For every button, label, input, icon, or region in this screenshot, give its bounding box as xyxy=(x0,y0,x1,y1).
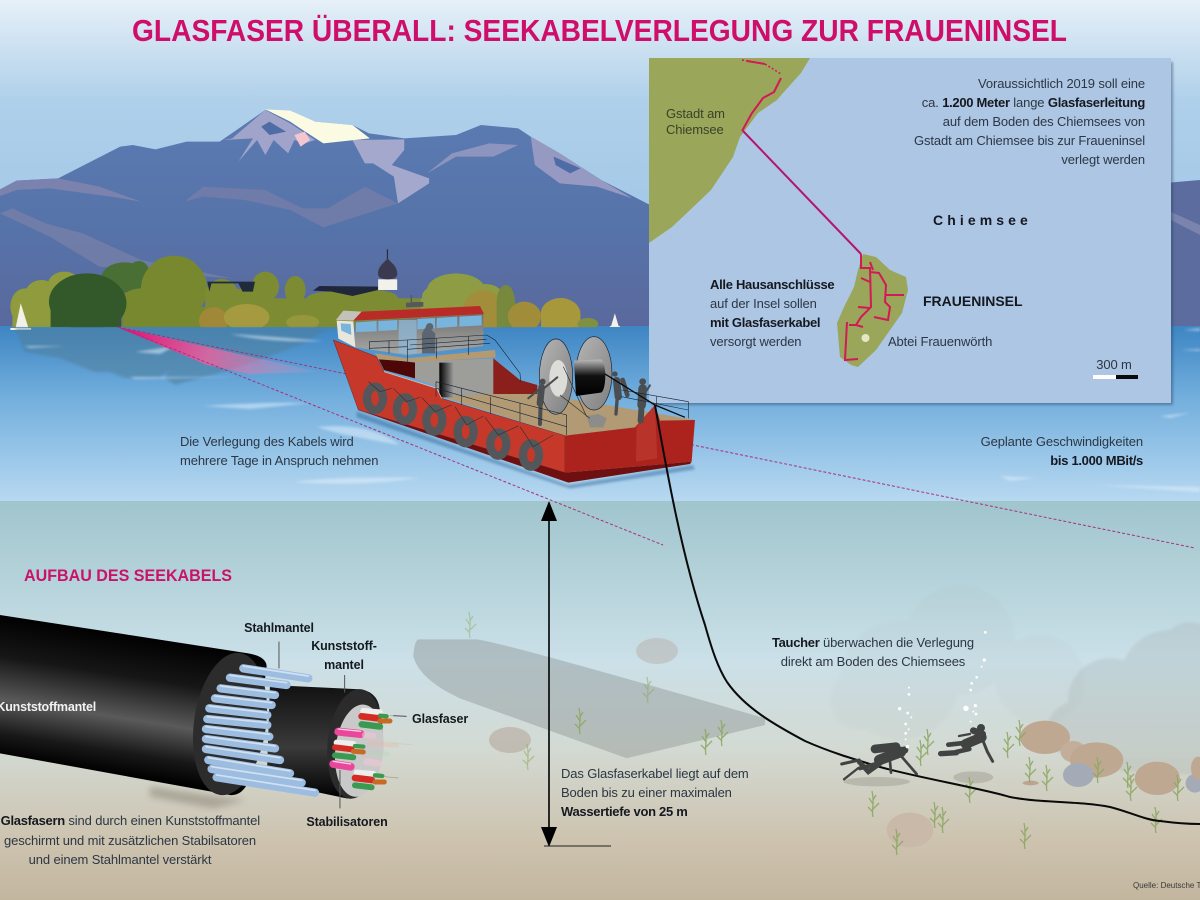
mainland xyxy=(649,58,810,243)
mountain edge right of map xyxy=(1165,180,1200,330)
scale bar: 300 m xyxy=(1096,357,1132,372)
ground shadow xyxy=(150,787,247,808)
text: laying duration: mehrere Tage in Anspruch nehmen xyxy=(180,453,378,468)
water highlights xyxy=(24,328,1200,492)
tree reflection in lake xyxy=(15,328,330,385)
text: water depth: Boden bis zu einer maximalen xyxy=(561,785,732,800)
pink cable wedge on lake xyxy=(117,327,320,374)
cable labels: Stahlmantel xyxy=(244,621,314,635)
crew silhouettes xyxy=(528,371,650,424)
island with trees and church xyxy=(10,249,620,334)
text: house connections: mit Glasfaserkabel xyxy=(710,315,820,330)
underwater section xyxy=(0,501,1200,900)
fibre bundle middle xyxy=(335,743,363,757)
boat xyxy=(333,295,695,489)
leader lines xyxy=(279,642,407,808)
text: planned speed: Geplante Geschwindigkeiten xyxy=(981,434,1143,449)
heading: cable structure: AUFBAU DES SEEKABELS xyxy=(24,567,232,585)
sailboat right xyxy=(610,313,620,327)
stabilisers xyxy=(333,729,378,767)
crew member at reel xyxy=(528,377,557,424)
map intro text: ca. 1.200 Meter lange Glasfaserleitung xyxy=(922,95,1145,110)
crew member at stern xyxy=(639,378,650,421)
boat shadow on water xyxy=(357,412,695,489)
tires xyxy=(367,387,539,467)
cable leaving the drum xyxy=(605,374,685,417)
fibre bundle bottom xyxy=(355,773,398,787)
fibre bundle top xyxy=(362,711,405,727)
seabed rocks and shadows xyxy=(843,721,1200,847)
railings xyxy=(369,335,688,435)
church xyxy=(313,249,397,296)
lake cable route xyxy=(743,131,861,254)
background: sky xyxy=(0,0,1200,330)
mid rocks xyxy=(489,638,678,753)
antenna xyxy=(406,295,423,307)
map panel xyxy=(649,58,1171,403)
inner cable xyxy=(267,685,388,802)
map intro text: verlegt werden xyxy=(1061,152,1145,167)
faded background rocks right xyxy=(1047,622,1200,775)
diver two xyxy=(941,724,993,761)
abbey marker xyxy=(862,334,870,342)
stairs xyxy=(493,358,537,394)
text: planned speed: bis 1.000 MBit/s xyxy=(1050,453,1143,468)
divers xyxy=(842,631,993,779)
sailboat left xyxy=(10,303,31,330)
jacket end face xyxy=(184,648,276,800)
map intro text: auf dem Boden des Chiemsees von xyxy=(943,114,1145,129)
text: water depth: Das Glasfaserkabel liegt auf dem xyxy=(561,766,749,781)
outer plastic jacket xyxy=(0,615,267,795)
island network xyxy=(845,254,904,360)
text: house connections: auf der Insel sollen xyxy=(710,296,817,311)
seaweed xyxy=(465,612,1184,855)
lake surface xyxy=(0,326,1200,502)
person in cabin xyxy=(422,323,435,353)
cable labels xyxy=(0,621,468,829)
text: cable description: Glasfasern sind durch einen Kunststoffmantel xyxy=(1,813,260,828)
text: laying duration: Die Verlegung des Kabels wird xyxy=(180,434,354,449)
hull bottom xyxy=(358,410,692,483)
upper deck xyxy=(375,350,496,362)
crew member behind reel xyxy=(612,371,627,414)
cable reel xyxy=(539,337,612,427)
tire ropes xyxy=(368,382,553,447)
deck xyxy=(442,392,695,436)
label: Fraueninsel: FRAUENINSEL xyxy=(923,293,1023,309)
label: Gstadt: Gstadt am xyxy=(666,106,725,121)
text: house connections: versorgt werden xyxy=(710,334,801,349)
cable labels: Stabilisatoren xyxy=(306,815,388,829)
label: Chiemsee: Chiemsee xyxy=(933,212,1032,228)
ghost fibre bundle xyxy=(370,743,412,754)
text: cable description: geschirmt und mit zusätzlichen Stabilsatoren xyxy=(4,833,256,848)
label: Gstadt: Chiemsee xyxy=(666,122,724,137)
laying cable xyxy=(655,405,1200,824)
label: Abtei: Abtei Frauenwörth xyxy=(888,334,992,349)
submarine cable cross-section xyxy=(0,615,412,808)
text: divers: direkt am Boden des Chiemsees xyxy=(781,654,966,669)
cable labels: Kunststoff- xyxy=(311,639,377,653)
hull side xyxy=(333,340,565,473)
text: house connections: Alle Hausanschlüsse xyxy=(710,277,834,292)
scale bar xyxy=(1093,357,1138,379)
map intro text: Gstadt am Chiemsee bis zur Fraueninsel xyxy=(914,133,1145,148)
dotted mainland route xyxy=(742,60,781,74)
faded background rocks centre xyxy=(830,585,1085,740)
upper cabin xyxy=(336,306,484,355)
island xyxy=(837,254,908,367)
network on mainland xyxy=(742,61,781,131)
title: GLASFASER ÜBERALL: SEEKABELVERLEGUNG ZUR FRAUENINSEL xyxy=(132,13,1067,48)
text: water depth: Wassertiefe von 25 m xyxy=(561,804,687,819)
cable labels: mantel xyxy=(324,658,364,672)
transom xyxy=(565,405,695,473)
steel wires xyxy=(206,666,315,793)
map panel shadow xyxy=(652,62,1173,405)
submerged hull shadow xyxy=(413,639,765,758)
mountain range xyxy=(0,109,650,330)
map intro text: Voraussichtlich 2019 soll eine xyxy=(978,76,1145,91)
lower cabin xyxy=(378,358,493,397)
right ridge streak xyxy=(1171,212,1200,235)
bubbles xyxy=(898,631,987,748)
text: divers: Taucher überwachen die Verlegung xyxy=(772,635,974,650)
diver one xyxy=(842,746,917,779)
text: cable description: und einem Stahlmantel verstärkt xyxy=(29,852,212,867)
cable route dashed lines xyxy=(118,327,1195,548)
cable labels: Glasfaser xyxy=(412,712,468,726)
depth arrow xyxy=(541,501,611,847)
